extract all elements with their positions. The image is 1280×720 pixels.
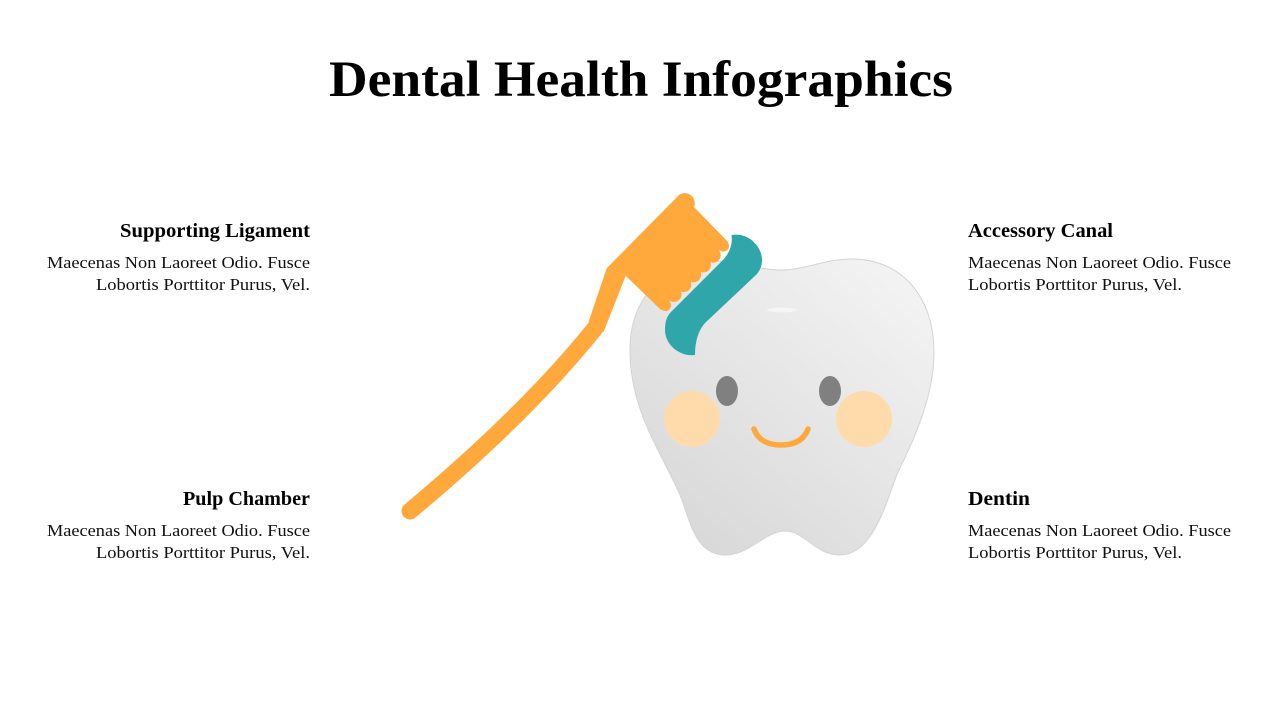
text block: Accessory Canal: Lobortis Porttitor Purus, Vel. <box>968 275 1182 294</box>
text block: Dentin: Dentin <box>968 488 1031 510</box>
tooth highlight <box>767 308 797 312</box>
icon: toothpaste <box>665 235 762 355</box>
text block: Accessory Canal <box>968 220 1231 294</box>
left cheek <box>664 391 720 447</box>
text block: Accessory Canal: Accessory Canal <box>968 220 1113 242</box>
text block: Supporting Ligament: Lobortis Porttitor Purus, Vel. <box>96 275 310 294</box>
text block: Supporting Ligament: Maecenas Non Laoreet Odio. Fusce <box>47 253 310 272</box>
text block: Supporting Ligament: Supporting Ligament <box>120 220 310 242</box>
icon: smiling tooth <box>630 259 934 555</box>
brush handle <box>410 327 596 511</box>
text block: Pulp Chamber: Pulp Chamber <box>183 488 310 510</box>
text block: Pulp Chamber <box>47 488 310 562</box>
text block: Dentin: Lobortis Porttitor Purus, Vel. <box>968 543 1182 562</box>
text block: Pulp Chamber: Lobortis Porttitor Purus, Vel. <box>96 543 310 562</box>
text block: Pulp Chamber: Maecenas Non Laoreet Odio. Fusce <box>47 521 310 540</box>
bristle tips <box>660 240 729 311</box>
right eye <box>819 376 841 406</box>
tooth body <box>630 259 934 555</box>
text block: Dentin <box>968 488 1231 562</box>
text block: Dentin: Maecenas Non Laoreet Odio. Fusce <box>968 521 1231 540</box>
icon: toothbrush <box>410 193 729 511</box>
right cheek <box>836 391 892 447</box>
brush head <box>607 193 728 310</box>
brush neck <box>588 268 626 332</box>
text block: Supporting Ligament <box>47 220 310 294</box>
text block: Accessory Canal: Maecenas Non Laoreet Odio. Fusce <box>968 253 1231 272</box>
smile <box>754 429 808 445</box>
title: Dental Health Infographics <box>329 52 953 108</box>
left eye <box>716 376 738 406</box>
